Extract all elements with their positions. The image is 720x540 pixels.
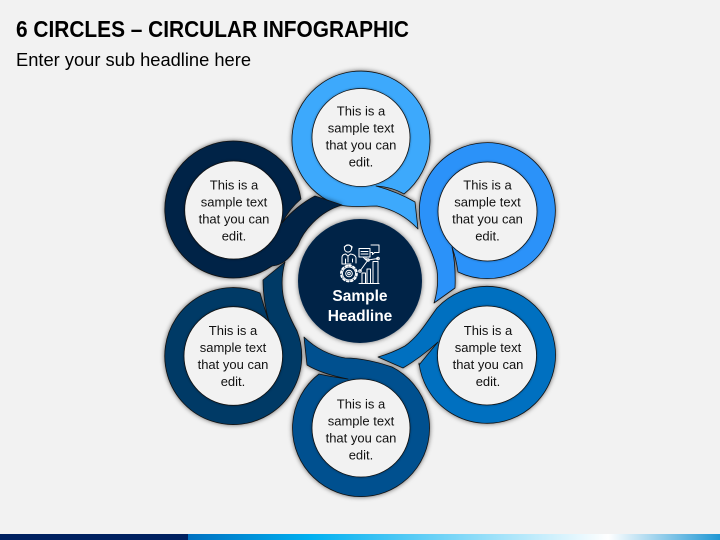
panel: lower right circle: that you can	[453, 357, 523, 372]
footer bar	[0, 534, 720, 540]
panel: lower left circle	[165, 262, 302, 425]
panel: top circle: This is a	[337, 104, 386, 118]
panel: bottom circle: sample text	[328, 414, 395, 428]
panel: upper left circle: sample text	[201, 194, 268, 210]
panel: lower right circle: sample text	[455, 340, 522, 355]
panel: top circle: edit.	[349, 154, 373, 170]
panel: bottom circle	[293, 337, 430, 497]
panel: upper left circle: edit.	[222, 228, 246, 244]
panel: upper left circle	[165, 141, 342, 278]
panel: top circle: that you can	[326, 138, 396, 152]
panel: upper left circle: that you can	[199, 212, 269, 226]
panel: lower right circle: This is a	[464, 323, 513, 338]
panel: lower left circle: sample text	[200, 340, 267, 355]
headline: Headline	[328, 308, 393, 325]
panel: lower left circle: This is a	[209, 323, 258, 338]
panel: upper left circle: This is a	[210, 178, 259, 192]
panel: lower right circle: edit.	[476, 374, 500, 389]
panel: upper right circle: that you can	[452, 212, 523, 226]
panel: lower left circle: that you can	[198, 357, 268, 372]
panel: upper right circle: edit.	[475, 228, 500, 244]
panel: lower right circle	[378, 286, 556, 423]
center hub	[298, 219, 422, 343]
icon: person, chat, gear and growth chart	[341, 245, 379, 284]
panel: top circle	[292, 71, 430, 229]
panel: top circle: sample text	[328, 120, 395, 136]
panel: bottom circle: edit.	[349, 448, 373, 462]
panel: bottom circle: that you can	[326, 430, 396, 446]
panel: lower left circle: edit.	[221, 374, 245, 389]
title: 6 CIRCLES – CIRCULAR INFOGRAPHIC	[16, 16, 409, 42]
panel: upper right circle: This is a	[463, 178, 512, 192]
panel: upper right circle	[419, 143, 555, 303]
panel: bottom circle: This is a	[337, 396, 386, 412]
subtitle: Enter your sub headline here	[16, 50, 251, 70]
panel: upper right circle: sample text	[454, 194, 521, 210]
headline: Sample	[332, 288, 388, 305]
